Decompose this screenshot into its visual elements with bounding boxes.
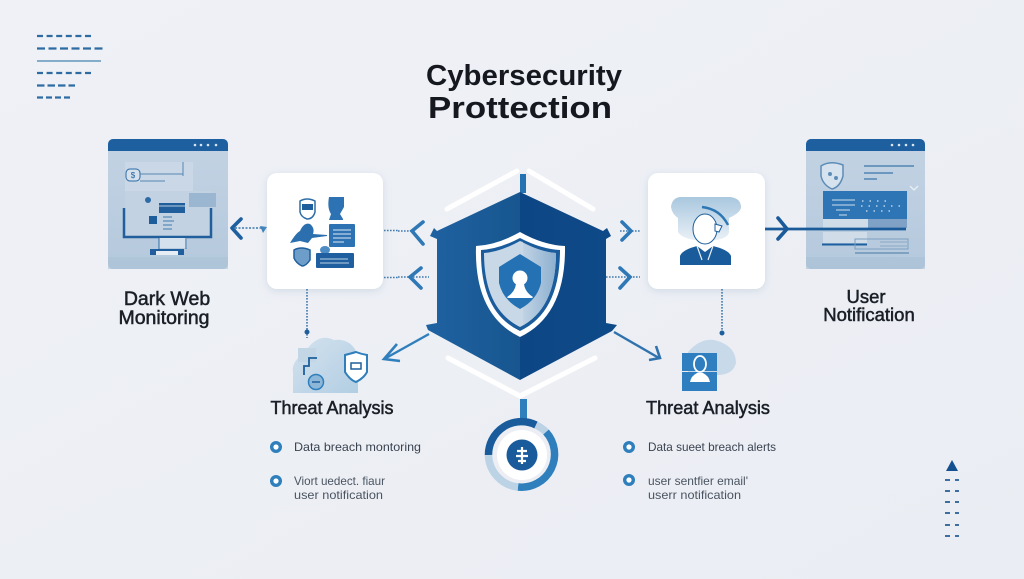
hexagon right half — [520, 192, 617, 380]
heading: threat analysis right: Threat Analysis — [646, 398, 770, 418]
heading: user notification: User — [846, 286, 886, 307]
arrows: left chevrons — [410, 222, 423, 288]
hexagon left half — [426, 192, 520, 380]
icon: speech bubble background — [671, 197, 741, 241]
panel: right white card — [648, 173, 765, 289]
decorative triangle and dashes bottom-right — [945, 460, 959, 536]
left bullet list: Viort uedect. fiaur — [294, 474, 385, 488]
icon: card — [320, 246, 330, 254]
icon: headset support person — [680, 207, 731, 265]
decorative dashes top-left — [37, 36, 106, 98]
right bullet list: userr notification — [648, 488, 741, 502]
left bullet list: user notification — [294, 488, 383, 502]
icon: shield badge — [821, 163, 843, 189]
right bullet list: user sentfier email' — [648, 474, 748, 488]
right bullet list — [625, 440, 776, 502]
icon: small shield — [294, 248, 310, 266]
stem top — [520, 174, 526, 193]
arrow: to dark web monitoring — [232, 219, 267, 238]
heading: user notification: Notification — [823, 304, 915, 325]
panel: user notification window — [806, 139, 925, 269]
shield — [476, 232, 565, 337]
panel: dark web monitoring window: $ — [131, 171, 136, 180]
arrow: hub to threat analysis right — [614, 332, 660, 360]
heading: dark web monitoring: Dark Web — [124, 288, 210, 310]
icon: analyst — [290, 224, 327, 243]
icon: bottom donut — [488, 399, 555, 487]
icon: user silhouette — [328, 197, 344, 220]
heading: dark web monitoring: Monitoring — [118, 307, 210, 329]
central hexagon with shield — [426, 171, 617, 396]
arrow: hub to threat analysis left — [384, 334, 429, 361]
left bullet list: Data breach montoring — [294, 440, 421, 454]
white bottom brackets — [448, 358, 595, 396]
connector dots — [304, 330, 724, 336]
left bullet list — [272, 440, 421, 502]
connectors: dotted lines between cards and hub — [307, 230, 722, 338]
panel: left white card — [267, 173, 383, 289]
icon: user profile threat analysis — [682, 340, 736, 391]
white top brackets — [447, 171, 593, 209]
title: Cybersecurity — [426, 60, 622, 92]
panel: dark web monitoring window — [108, 139, 228, 269]
icon: document — [329, 224, 355, 247]
heading: threat analysis left: Threat Analysis — [270, 398, 394, 418]
title line 2: Prottection — [428, 90, 612, 125]
icon: cloud threat analysis — [293, 338, 367, 393]
right bullet list: Data suеet breach alerts — [648, 440, 776, 454]
icon: shield — [300, 199, 315, 219]
arrows: right chevrons — [620, 222, 631, 288]
arrow: to user notification — [765, 218, 906, 239]
